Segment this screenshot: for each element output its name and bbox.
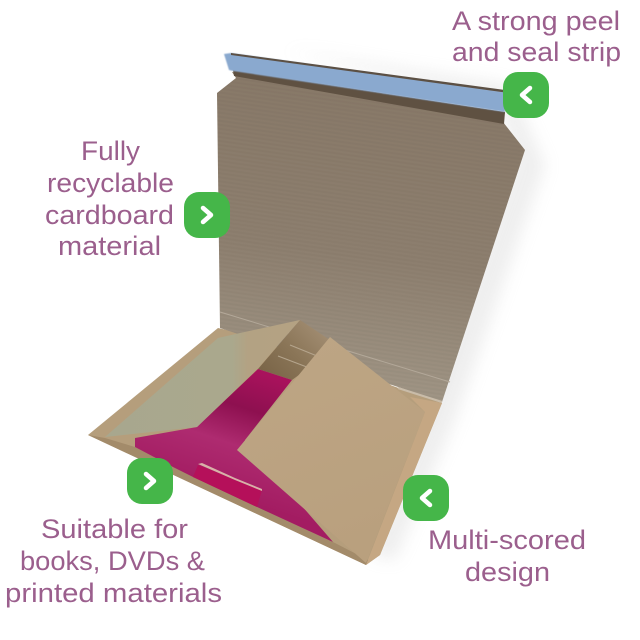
lid panel [217,72,525,402]
icon: arrow button multi-scored [403,475,449,521]
label: peel and seal strip: and seal strip [452,37,621,67]
label: recyclable cardboard: recyclable [47,168,174,198]
icon: arrow button suitable [127,458,173,504]
strip top edge [231,53,505,92]
pink insert [135,369,333,542]
icon: arrow button cardboard [184,192,230,238]
label: suitable for: Suitable for [41,514,188,544]
box shadow [285,50,545,560]
label: peel and seal strip [452,6,621,67]
dark strip edge [233,70,505,124]
base front wall [88,435,368,565]
base right tray [366,397,442,565]
label: suitable for [5,514,222,608]
gap score lines [278,345,322,369]
label: multi-scored design: design [465,557,550,587]
pink tab [193,465,262,507]
icon: arrow button strip [503,72,549,118]
label: multi-scored design [428,525,586,587]
label: peel and seal strip: A strong peel [452,6,620,36]
label: suitable for: printed materials [5,578,222,608]
base of box [88,328,442,565]
grey-green flap [105,320,300,437]
label: recyclable cardboard [45,136,174,261]
gap between flaps [258,320,340,380]
lid score lines [220,312,450,402]
label: recyclable cardboard: Fully [81,136,141,166]
illustration: open cardboard mailer box [88,53,525,565]
label: recyclable cardboard: material [58,231,161,261]
label: suitable for: books, DVDs & [20,546,205,576]
tan flap [237,337,425,563]
label: recyclable cardboard: cardboard [45,200,174,230]
label: multi-scored design: Multi-scored [428,525,586,555]
peel and seal strip [224,53,505,112]
tab slot [198,463,262,491]
